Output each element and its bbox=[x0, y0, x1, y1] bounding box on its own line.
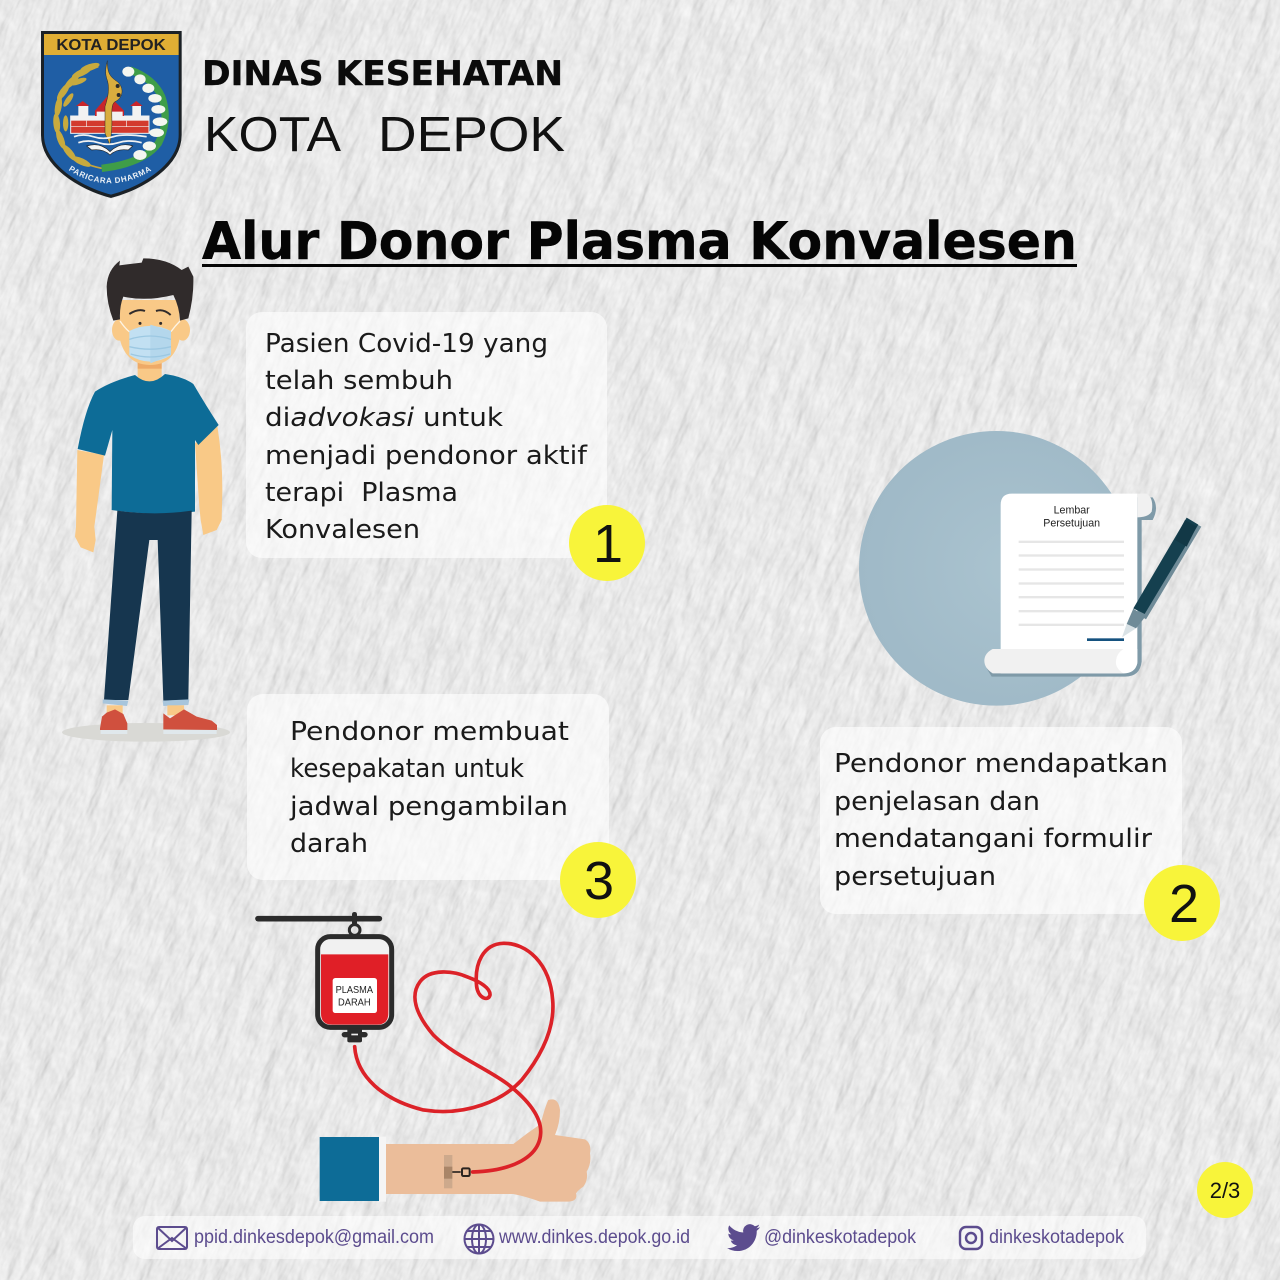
cannula bbox=[452, 1169, 461, 1174]
icon: globe bbox=[464, 1224, 494, 1254]
panel: step 1 text: Konvalesen bbox=[265, 515, 420, 545]
red shoes bbox=[100, 709, 127, 730]
cuff bbox=[379, 1137, 386, 1202]
illustration: consent form and pen bbox=[859, 431, 1201, 706]
panel: step 3 text: Pendonor membuat bbox=[290, 717, 569, 747]
badge: page number: 2/3 bbox=[1210, 1178, 1240, 1203]
illustration: man wearing mask bbox=[62, 258, 230, 742]
eyebrows and eyes bbox=[129, 310, 171, 315]
heading: KOTA DEPOK: DEPOK bbox=[378, 108, 565, 162]
instagram handle: dinkeskotadepok bbox=[989, 1227, 1124, 1248]
form title: Lembar bbox=[1054, 505, 1090, 517]
navy trousers bbox=[104, 511, 192, 701]
hanging rail bbox=[258, 910, 379, 927]
badge: number 2: 2 bbox=[1169, 874, 1199, 934]
heading: DINAS KESEHATAN: DINAS KESEHATAN bbox=[202, 54, 563, 94]
badge: number 2 bbox=[1144, 865, 1220, 941]
badge: number 3: 3 bbox=[584, 851, 614, 911]
icon: twitter bird bbox=[727, 1224, 760, 1251]
panel: step 1 text: terapi Plasma bbox=[265, 478, 458, 508]
badge: page number bbox=[1197, 1162, 1253, 1218]
scroll shadow bbox=[987, 497, 1156, 677]
footer: contact bar bbox=[133, 1216, 1146, 1259]
hair bbox=[107, 258, 193, 321]
panel: step 2 text: mendatangani formulir bbox=[834, 824, 1152, 854]
pen bbox=[1137, 520, 1201, 619]
right arm bbox=[195, 426, 222, 535]
badge: number 3 bbox=[560, 842, 636, 918]
plaster bbox=[444, 1155, 452, 1188]
blood bag bbox=[318, 937, 392, 1027]
illustration: consent form and pen: Persetujuan bbox=[1043, 517, 1100, 529]
badge: number 1: 1 bbox=[593, 514, 623, 574]
logo: Kota Depok shield: PARICARA DHARMA bbox=[68, 166, 152, 184]
form lines bbox=[1019, 541, 1124, 626]
panel: step 1 text: Pasien Covid-19 yang bbox=[265, 329, 548, 359]
icon: envelope bbox=[157, 1227, 187, 1249]
panel: step 2 text: penjelasan dan bbox=[834, 787, 1040, 817]
heading: KOTA DEPOK bbox=[204, 108, 565, 162]
title: Alur Donor Plasma Konvalesen bbox=[202, 212, 1077, 272]
panel: step 2 text: Pendonor mendapatkan bbox=[834, 749, 1168, 779]
illustration: plasma bag, heart tube and arm: PLASMA bbox=[336, 985, 373, 996]
panel: step 1 text: menjadi pendonor aktif bbox=[265, 441, 588, 471]
ankles bbox=[107, 705, 123, 715]
panel: step 3 text: jadwal pengambilan bbox=[289, 792, 568, 822]
signature line bbox=[1087, 638, 1124, 641]
neck bbox=[138, 362, 162, 382]
panel: step 3 text bbox=[247, 694, 609, 880]
panel: step 1 text: diadvokasi untuk bbox=[265, 403, 503, 433]
website: www.dinkes.depok.go.id bbox=[498, 1227, 690, 1248]
logo: Kota Depok shield: KOTA DEPOK bbox=[56, 37, 166, 54]
arm bbox=[386, 1099, 590, 1202]
teal shirt bbox=[78, 374, 219, 514]
badge: number 1 bbox=[569, 505, 645, 581]
left arm bbox=[75, 450, 104, 552]
panel: step 3 text: darah bbox=[290, 829, 368, 859]
logo: Kota Depok shield bbox=[40, 30, 182, 198]
trouser cuffs bbox=[103, 699, 189, 706]
panel: step 1 text: telah sembuh bbox=[265, 366, 453, 396]
surgical mask bbox=[120, 321, 180, 332]
paper sheet bbox=[1001, 494, 1137, 673]
icon: instagram bbox=[960, 1227, 982, 1249]
bag valve bbox=[342, 1032, 368, 1037]
illustration: plasma bag, heart tube and arm bbox=[258, 912, 590, 1202]
ears bbox=[112, 319, 127, 341]
heading: KOTA DEPOK: KOTA bbox=[204, 108, 341, 162]
illustration: plasma bag, heart tube and arm: DARAH bbox=[338, 997, 371, 1008]
twitter handle: @dinkeskotadepok bbox=[764, 1227, 916, 1248]
heart-shaped red tube bbox=[355, 943, 553, 1172]
bottom roll bbox=[984, 649, 1123, 673]
blue disc bbox=[859, 431, 1134, 706]
panel: step 1 text bbox=[246, 312, 607, 558]
ground shadow bbox=[62, 723, 230, 742]
face bbox=[120, 300, 179, 365]
panel: step 3 text: kesepakatan untuk bbox=[290, 754, 524, 784]
panel: step 2 text bbox=[820, 727, 1182, 914]
panel: step 2 text: persetujuan bbox=[834, 862, 996, 892]
email: ppid.dinkesdepok@gmail.com bbox=[194, 1227, 434, 1248]
